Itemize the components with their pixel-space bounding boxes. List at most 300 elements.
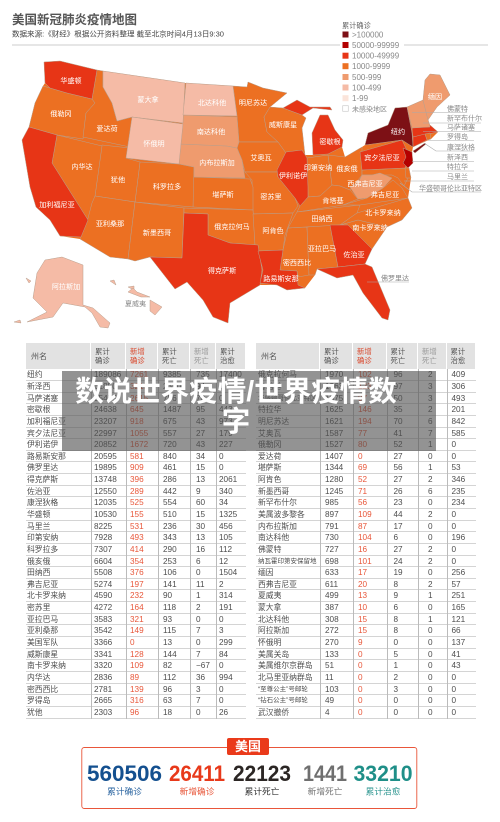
table: right: 730: [325, 533, 339, 542]
table: left: 4272: [94, 603, 112, 612]
table: left: 840: [163, 452, 177, 461]
table: left: 13: [196, 533, 205, 542]
table: left: 华盛顿: [27, 510, 50, 519]
outside state labels with leader lines: 马萨诸塞: [447, 123, 475, 132]
table: left: 189086: [94, 370, 121, 379]
state name labels: 弗吉尼亚: [371, 190, 399, 199]
table: right: “钻石公主”号邮轮: [258, 697, 308, 704]
table: left: 179: [219, 428, 233, 438]
table: right: 10: [358, 603, 367, 612]
table: right: 698: [325, 557, 339, 566]
table: right: 194: [358, 417, 372, 426]
table: left: 286: [163, 475, 177, 484]
table: right: 52: [394, 440, 403, 449]
table: right: 西弗吉尼亚: [258, 580, 297, 589]
table: left: 139: [130, 685, 144, 694]
table header: left: 死亡: [162, 356, 177, 365]
state name labels: 得克萨斯: [208, 266, 236, 275]
table: left: 0: [219, 452, 224, 461]
table: left: 6: [196, 557, 201, 566]
table: left: 973: [219, 417, 233, 426]
table: right: 0: [394, 696, 398, 705]
state name labels: 肯塔基: [322, 196, 344, 205]
table: left: 16: [196, 545, 205, 554]
legend: 1000-9999: [352, 62, 391, 71]
table: right: 8: [394, 580, 398, 589]
table: right: 41: [452, 650, 461, 659]
state name labels: 新墨西哥: [143, 228, 171, 237]
table: left: 0: [196, 568, 201, 577]
table: right: 0: [428, 603, 433, 612]
table header: right: 新增: [357, 346, 372, 356]
table: left: 1055: [130, 428, 148, 438]
table: left: 0: [196, 638, 201, 647]
table: right: 艾奥瓦: [258, 428, 281, 438]
state name labels: 俄亥俄: [336, 164, 358, 173]
table: left: 俄亥俄: [27, 557, 50, 566]
table: left: 5508: [94, 568, 112, 577]
table: right: 43: [452, 661, 461, 670]
table: left: 15: [196, 510, 205, 519]
table: right: 1625: [325, 405, 343, 414]
table: left: 30: [196, 522, 205, 531]
table: right: 6: [428, 487, 433, 496]
state name labels: 内华达: [71, 162, 93, 171]
state name labels: 加利福尼亚: [39, 200, 75, 209]
table: left: 7928: [94, 533, 112, 542]
title: 美国新冠肺炎疫情地图: [12, 12, 137, 27]
table: right: 70: [394, 417, 403, 426]
table: left: 19895: [94, 463, 117, 472]
table: right: 8: [394, 626, 398, 635]
table: left: 93: [163, 615, 172, 624]
stat: cumulative recovered: [354, 761, 412, 796]
table: right: 美属维尔京群岛: [258, 661, 313, 670]
table: left: 3320: [94, 661, 112, 670]
table: right: 肯塔基: [258, 382, 281, 391]
table: right: 19: [394, 568, 403, 577]
table header: right: 累计: [450, 346, 465, 356]
table: right: 77: [358, 428, 367, 438]
table: right: 0: [428, 626, 433, 635]
table: right: 新墨西哥: [258, 487, 289, 496]
outside state labels with leader lines: 华盛顿哥伦比亚特区: [419, 184, 482, 192]
map and legend: [12, 12, 488, 328]
state name labels: 南达科他: [197, 127, 225, 136]
table: left: 印第安纳: [27, 533, 58, 542]
table: right: 201: [452, 405, 465, 414]
table: right: 夏威夷: [258, 591, 281, 600]
table header: right: 新增: [422, 346, 437, 356]
table header: right: 死亡: [422, 356, 437, 365]
outside state labels with leader lines: 康涅狄格: [447, 142, 475, 152]
table: left: 7: [196, 650, 201, 659]
table header: left: 州名: [31, 352, 47, 360]
table: right: 123: [358, 382, 372, 391]
legend: 1-99: [352, 94, 369, 103]
table: left: 105: [219, 533, 233, 542]
table: left: 340: [219, 487, 233, 496]
table: left: 164: [130, 603, 144, 612]
table: right: 49: [325, 696, 334, 705]
table: right: 特拉华: [258, 405, 281, 414]
table: right: 103: [325, 685, 339, 694]
table: left: 96: [163, 685, 172, 694]
state name labels: 俄勒冈: [50, 109, 72, 118]
table: left: 22997: [94, 428, 117, 438]
table: right: 0: [428, 685, 433, 694]
table: right: 20: [358, 580, 367, 589]
table: left: 2615: [130, 394, 148, 403]
table: right: 1344: [325, 463, 343, 472]
table: left: 4590: [94, 591, 112, 600]
table: left: 2303: [94, 708, 112, 717]
table: left: 155: [130, 510, 144, 519]
table: right: 8: [394, 615, 398, 624]
table: left: 2665: [94, 696, 112, 705]
table: left: 0: [219, 615, 224, 624]
table: left: 马里兰: [27, 522, 50, 531]
table: left: 20852: [94, 440, 117, 449]
table: left: 1672: [130, 440, 148, 449]
table: right: 165: [452, 603, 465, 612]
table: right: 493: [452, 394, 465, 403]
table: left: 24638: [94, 405, 117, 414]
table: left: 犹他: [27, 708, 43, 717]
table: right: 内布拉斯加: [258, 522, 297, 531]
table: left: 26: [219, 708, 228, 717]
table: left: 3583: [94, 615, 112, 624]
table: left: 232: [130, 591, 144, 600]
table: left: 2781: [94, 685, 112, 694]
table: right: 2: [394, 673, 398, 682]
state name labels: 蒙大拿: [137, 95, 159, 104]
table: right: 133: [325, 650, 339, 659]
table: right: “至尊公主”号邮轮: [258, 686, 308, 693]
table: right: 0: [452, 452, 456, 461]
state name labels: 亚拉巴马: [308, 244, 336, 253]
table: right: 佛蒙特: [258, 545, 281, 554]
table: left: 43: [196, 440, 205, 449]
table: right: 俄克拉何马: [258, 370, 297, 379]
table: right: 阿肯色: [258, 475, 281, 484]
table: left: 510: [163, 510, 177, 519]
table: left: 442: [163, 487, 177, 496]
table: left: 557: [163, 428, 177, 438]
state name labels: 科罗拉多: [153, 182, 181, 191]
table: left: 461: [163, 463, 177, 472]
table: left: 115: [163, 626, 176, 635]
table: right: 101: [358, 557, 372, 566]
table: left: 13: [196, 475, 205, 484]
table header: right: 州名: [261, 352, 277, 360]
table: right: 美属波多黎各: [258, 510, 305, 519]
table: right: 1245: [325, 487, 343, 496]
table: left: 12: [219, 557, 228, 566]
table: right: 50: [394, 394, 403, 403]
table: right: 0: [428, 568, 433, 577]
table: left: 1325: [219, 510, 237, 519]
table: left: 316: [130, 696, 144, 705]
table: right: 1: [428, 463, 433, 472]
table: right: 0: [428, 533, 433, 542]
legend: 50000-99999: [352, 41, 400, 50]
table: left: 581: [130, 452, 144, 461]
table: left: 95: [196, 405, 205, 414]
table: left: 909: [130, 463, 144, 472]
table: right: 1621: [325, 417, 343, 426]
table: left: 威斯康星: [27, 650, 58, 659]
legend: >100000: [352, 30, 384, 40]
table: left: 191: [219, 603, 233, 612]
stat: cumulative recovered: 累计治愈: [366, 786, 401, 796]
table: left: 118: [163, 603, 176, 612]
state name labels: 佐治亚: [343, 250, 365, 259]
table: right: 611: [325, 580, 338, 589]
state name labels: 俄克拉何马: [214, 222, 250, 231]
table: left: 新泽西: [27, 382, 50, 391]
table: right: 6: [428, 417, 433, 426]
stat: new confirmed: 新增确诊: [180, 786, 215, 796]
stat: new deaths: [303, 761, 347, 796]
table: left: 18: [163, 708, 172, 717]
table: left: 36: [196, 673, 205, 682]
table: left: 内华达: [27, 673, 50, 682]
state name labels: 亚利桑那: [96, 219, 124, 228]
table: right: 2: [428, 580, 433, 589]
table: left: 马萨诸塞: [27, 394, 58, 403]
table: left: 10530: [94, 510, 117, 519]
table: left: 罗得岛: [27, 696, 50, 705]
outside state labels with leader lines: 新泽西: [447, 152, 468, 162]
table: left: 396: [130, 475, 144, 484]
table: left: 3542: [94, 626, 112, 635]
table: right: 17: [358, 568, 367, 577]
table: left: 加利福尼亚: [27, 417, 66, 426]
table: right: 0: [358, 696, 363, 705]
table header: right: 治愈: [450, 356, 465, 365]
table: left: 7307: [94, 545, 112, 554]
table: left: 456: [219, 522, 233, 531]
table: left: 田纳西: [27, 568, 50, 577]
overlay title banner: [62, 371, 436, 451]
state name labels: 犹他: [111, 175, 125, 184]
table: left: 61850: [94, 382, 117, 391]
badge: USA: [227, 738, 269, 755]
table: right: 346: [452, 475, 465, 484]
table: left: 25475: [94, 394, 117, 403]
table: right: 17: [394, 522, 403, 531]
stat: new confirmed: [169, 761, 225, 796]
table: left: 12550: [94, 487, 117, 496]
stat: cumulative deaths: 22123: [233, 761, 291, 786]
state name labels: 伊利诺伊: [279, 171, 307, 180]
table: left: 15: [196, 463, 205, 472]
state name labels: 西弗吉尼亚: [347, 179, 383, 188]
table: left: 得克萨斯: [27, 475, 58, 484]
table: right: 3: [428, 394, 433, 403]
state name labels: 印第安纳: [304, 163, 332, 172]
stat: cumulative confirmed: 560506: [87, 761, 162, 786]
table: left: 美国军队: [27, 638, 58, 647]
table: left: 6604: [94, 557, 112, 566]
table: right: 104: [358, 533, 372, 542]
table header: left: 死亡: [194, 356, 209, 365]
table: right: 196: [452, 533, 465, 542]
table: right: 235: [452, 487, 465, 496]
stat: cumulative confirmed: [87, 761, 162, 796]
table: left: 17400: [219, 370, 242, 379]
table: right: 251: [452, 591, 465, 600]
table: left: 128: [130, 650, 144, 659]
US states map: [14, 61, 450, 328]
table: right: 53: [452, 463, 461, 472]
table: right: 57: [452, 580, 461, 589]
state name labels: 宾夕法尼亚: [364, 153, 400, 162]
table: right: 270: [325, 638, 339, 647]
table: right: 阿拉斯加: [258, 626, 289, 635]
table header: left: 确诊: [95, 356, 110, 365]
table: right: 308: [325, 615, 339, 624]
table: right: 56: [394, 463, 403, 472]
table: left: 109: [130, 661, 144, 670]
table: left: 236: [163, 522, 177, 531]
table: right: 0: [428, 498, 433, 507]
outside state labels with leader lines: 马里兰: [447, 172, 468, 181]
table: left: 343: [163, 533, 177, 542]
table: left: 伊利诺伊: [27, 440, 58, 449]
table: right: 0: [428, 650, 433, 659]
table: right: 1280: [325, 475, 343, 484]
table: right: 纳瓦霍印第安保留地: [258, 558, 316, 565]
table: right: 1587: [325, 428, 343, 438]
table header: left: [26, 343, 245, 369]
table: left: 3341: [94, 650, 112, 659]
table: right: 11: [325, 673, 334, 682]
table: left: 354: [130, 557, 144, 566]
table: left: 7261: [130, 370, 148, 379]
table: right: 1: [428, 591, 433, 600]
table: right: 1: [428, 440, 433, 449]
table: right: 842: [452, 417, 465, 426]
table: left: 720: [163, 440, 177, 449]
table: left: 197: [130, 580, 144, 589]
table: right: 24: [394, 557, 403, 566]
state name labels: 密歇根: [319, 137, 341, 146]
table: right: 272: [325, 626, 339, 635]
table: left: 2: [219, 580, 224, 589]
table: left: 70: [196, 394, 205, 403]
table: right: 0: [428, 452, 433, 461]
table: right: 4: [325, 708, 330, 717]
table: left: 253: [163, 557, 177, 566]
state name labels: [39, 76, 442, 291]
table: right: 0: [428, 638, 433, 647]
table: right: 0: [452, 673, 456, 682]
table: left: 南卡罗来纳: [27, 661, 66, 670]
table: right: 15: [358, 626, 367, 635]
table: left: 密歇根: [27, 405, 50, 414]
table: right: 2: [428, 545, 433, 554]
table: left: 314: [219, 591, 233, 600]
table: left: 34: [196, 452, 205, 461]
state name labels: 密西西比: [283, 258, 311, 267]
table: left: 112: [163, 673, 176, 682]
table: right: 爱达荷: [258, 452, 281, 461]
state name labels: 威斯康星: [269, 120, 297, 129]
legend: 500-999: [352, 73, 382, 82]
outside state labels with leader lines: 罗得岛: [447, 132, 468, 141]
stat: cumulative confirmed: 累计确诊: [107, 786, 142, 796]
table: left: 645: [130, 405, 144, 414]
table: left: 290: [163, 545, 177, 554]
table header: left: 新增: [194, 346, 209, 356]
table: left: 106: [163, 568, 177, 577]
table: left: 376: [130, 568, 144, 577]
table: left: 宾夕法尼亚: [27, 428, 66, 438]
table: right: 0: [452, 522, 456, 531]
table: right: 71: [358, 487, 367, 496]
table: right: 13: [358, 591, 367, 600]
table: right: 409: [452, 370, 465, 379]
legend: 未感染地区: [352, 104, 387, 114]
state name labels: 华盛顿: [60, 76, 82, 85]
table: right: 俄勒冈: [258, 440, 281, 449]
table: left: 0: [196, 708, 201, 717]
table: left: 佛罗里达: [27, 463, 58, 472]
table: left: 亚利桑那: [27, 626, 58, 635]
table: right: 0: [428, 696, 433, 705]
table: right: 北马里亚纳群岛: [258, 673, 313, 682]
table: left: 5274: [94, 580, 112, 589]
table: left: 1: [196, 591, 201, 600]
subtitle: 数据来源:《财经》根据公开资料整理 截至北京时间4月13日9:30: [12, 30, 224, 38]
table: right: 1875: [325, 394, 343, 403]
table: left: 11: [196, 580, 204, 589]
table: right: 0: [452, 557, 456, 566]
table: left: 0: [219, 382, 224, 391]
table: right: 585: [452, 428, 465, 438]
table: right: 0: [358, 673, 363, 682]
table: left: 1504: [219, 568, 237, 577]
table: left: 3: [219, 626, 224, 635]
table: left: 13: [163, 638, 172, 647]
outside state labels with leader lines: 新罕布什尔: [447, 114, 482, 122]
table: left: 20595: [94, 452, 117, 461]
table: right: 0: [452, 708, 456, 717]
stat: cumulative deaths: 累计死亡: [245, 786, 280, 796]
table header: left: 治愈: [220, 356, 235, 365]
table: right: 52: [358, 475, 367, 484]
outside state labels with leader lines: [125, 104, 482, 308]
table: left: 531: [130, 522, 144, 531]
table: left: 7: [196, 626, 201, 635]
table: left: 康涅狄格: [27, 498, 58, 507]
table: left: 918: [130, 417, 144, 426]
table: left: 2: [196, 603, 201, 612]
table: left: 994: [219, 673, 233, 682]
table: left: 2836: [94, 673, 112, 682]
state name labels: 怀俄明: [143, 139, 165, 148]
table: left: 3219: [130, 382, 148, 391]
table: right: 0: [428, 522, 433, 531]
table: right: 16: [358, 545, 367, 554]
table: left: 路易斯安那: [27, 452, 66, 461]
table: right: 41: [394, 428, 403, 438]
table: right: 北达科他: [258, 615, 289, 624]
table: right: 2: [428, 510, 433, 519]
table: left: 2061: [219, 475, 237, 484]
